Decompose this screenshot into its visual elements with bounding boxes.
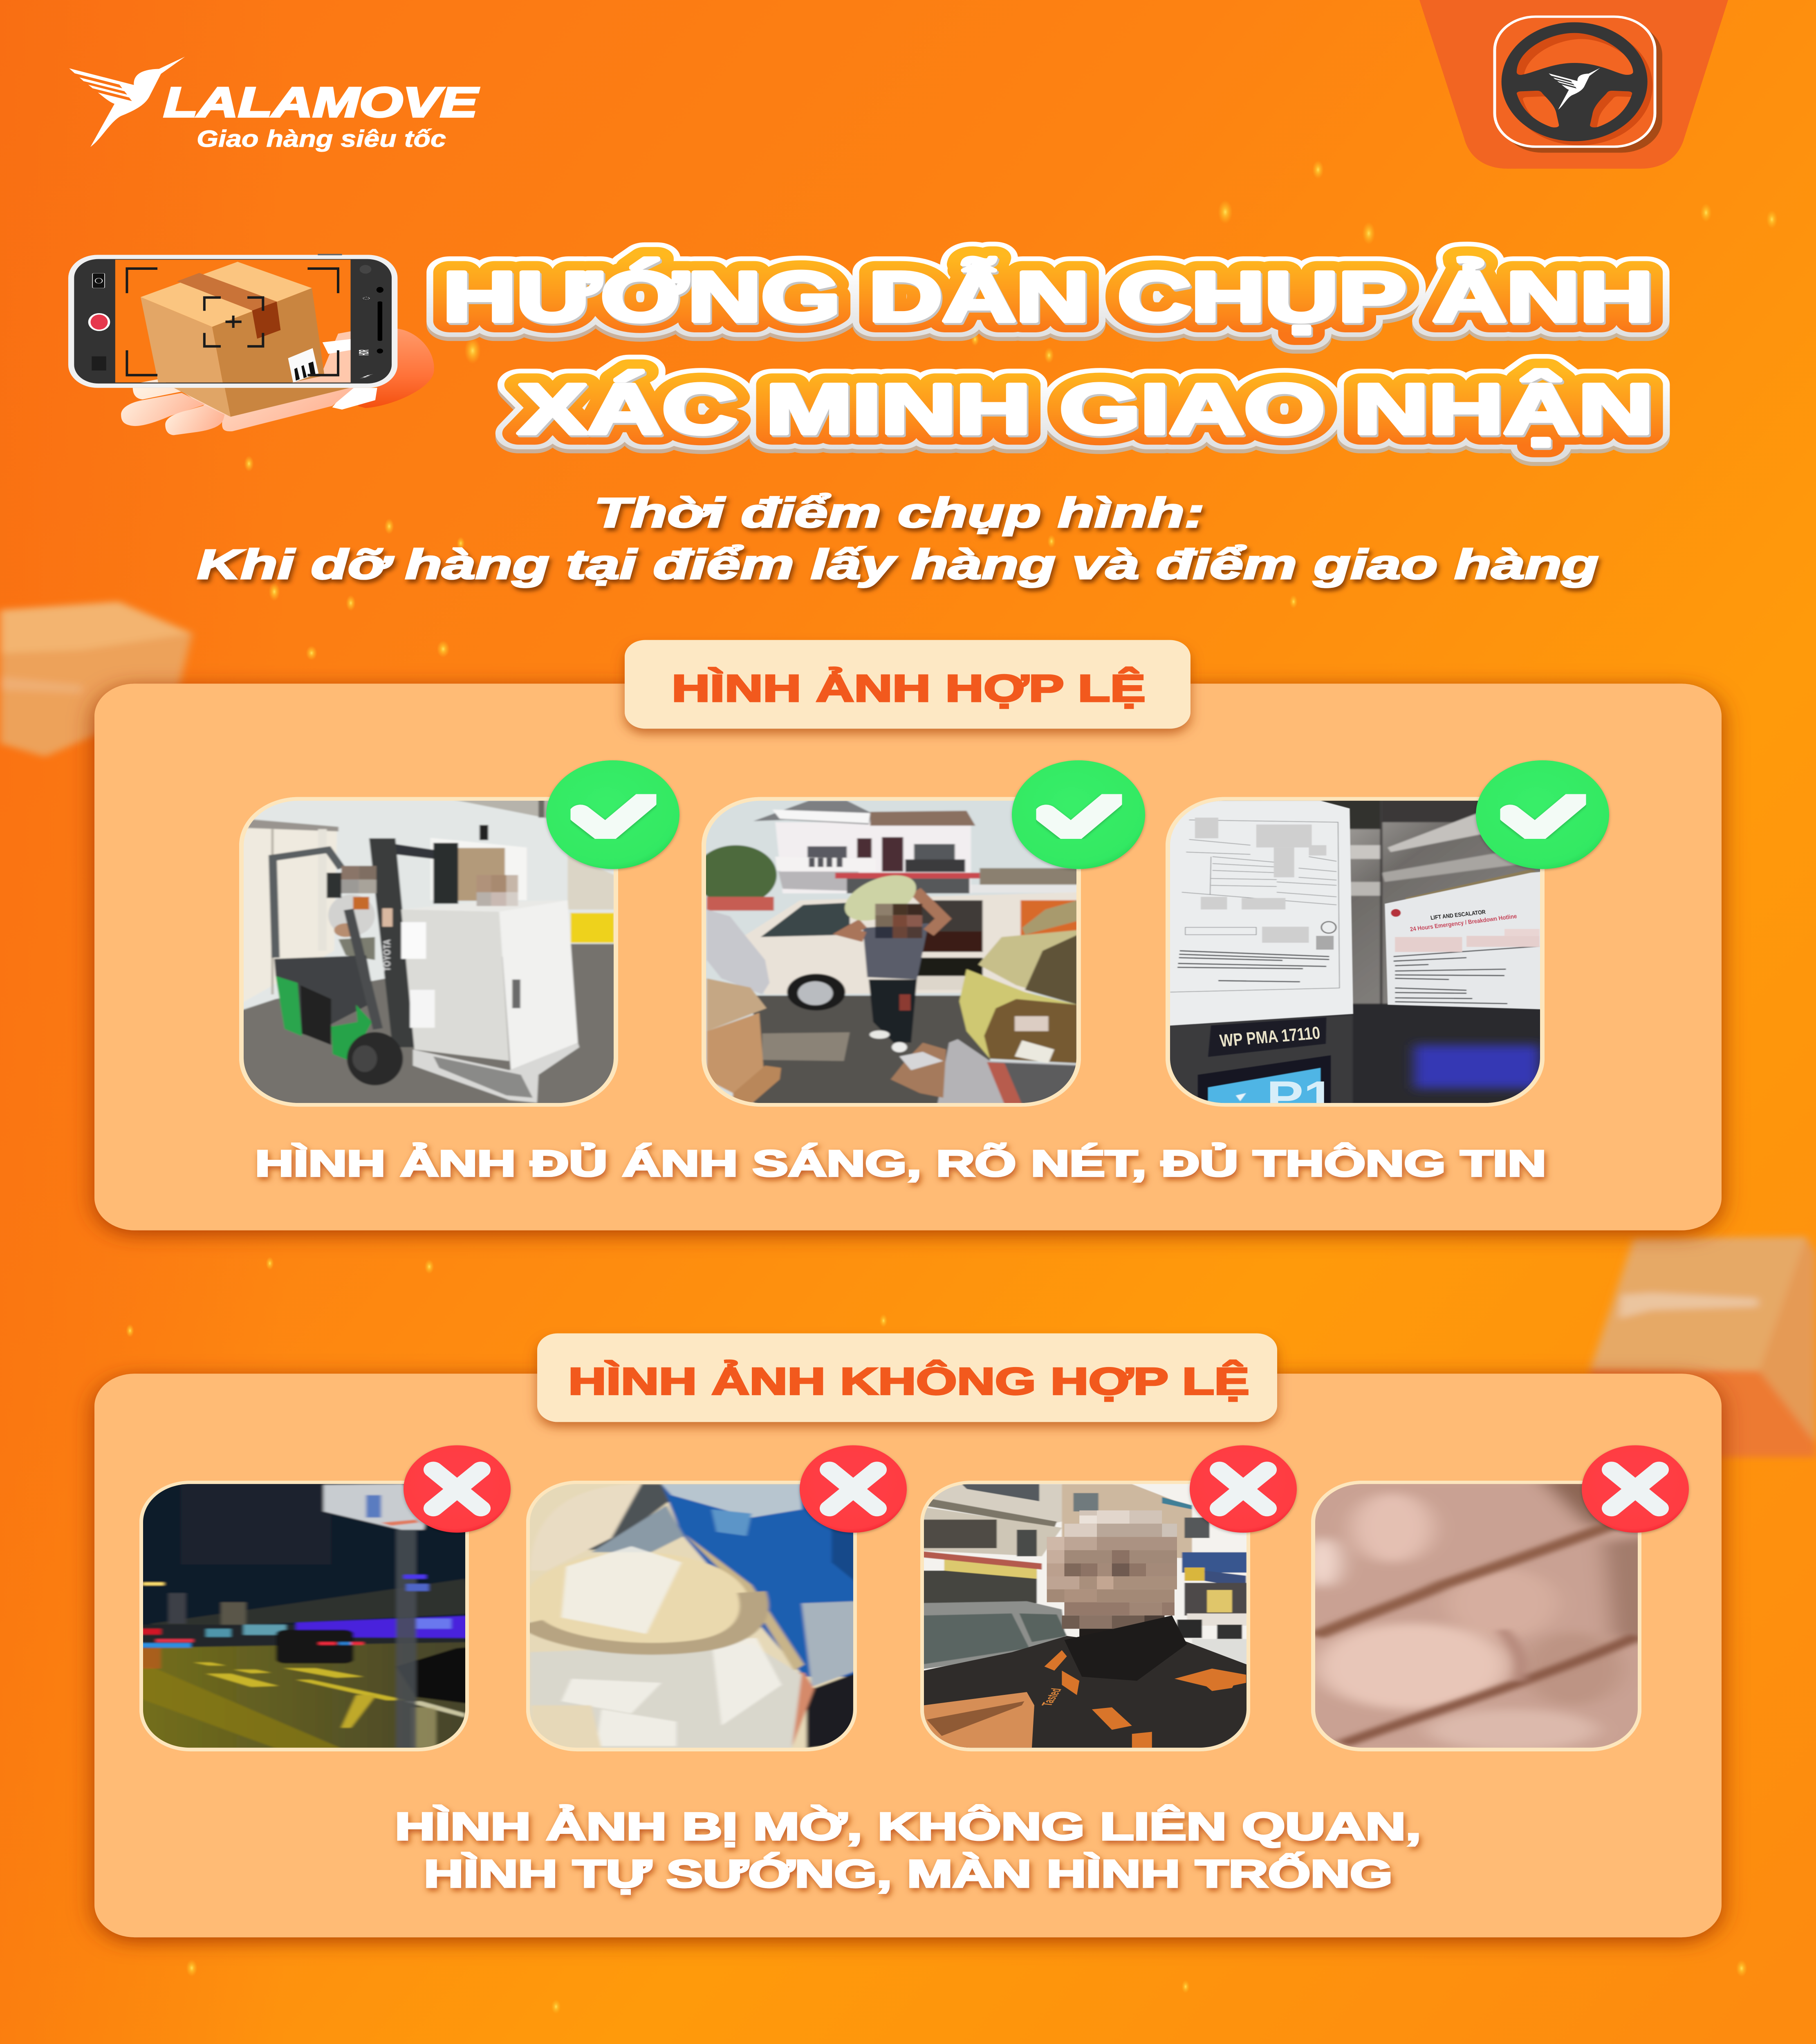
photo: blurry night road (131, 1481, 481, 1751)
pixelated face (912, 1511, 1252, 1750)
icon: cross 4 (1582, 1446, 1689, 1533)
photo: irrelevant parcel close-up (521, 1481, 862, 1751)
elevator plate label: WP PMA 17110 (1219, 1023, 1321, 1051)
panel: invalid photos (94, 1334, 1722, 1937)
heading tag: HÌNH ẢNH HỢP LỆ (672, 667, 1146, 710)
photo: delivery documents (1157, 797, 1566, 1121)
photo: forklift (229, 797, 638, 1109)
box right face (212, 288, 325, 383)
photo: forklift: TOYOTA (381, 939, 392, 971)
title line 1: HƯỚNG DẪN CHỤP ẢNH (444, 259, 1655, 338)
phone screen (115, 260, 354, 383)
icon: hummingbird (69, 57, 185, 147)
icon: check 2 (1012, 760, 1145, 869)
title line 2: XÁC MINH GIAO NHẬN (520, 372, 1655, 450)
title line 1: HƯỚNG DẪN CHỤP ẢNH (443, 257, 1653, 336)
box left face (141, 297, 223, 383)
box top face (141, 262, 312, 327)
box lower part (174, 388, 231, 417)
hand sleeve (358, 329, 434, 408)
title line 1: HƯỚNG DẪN CHỤP ẢNH (443, 261, 1653, 340)
photo: rider selfie (912, 1481, 1262, 1751)
phone body (68, 255, 397, 388)
wordmark: LALAMOVE (164, 79, 479, 126)
icon: cross 3 (1190, 1446, 1297, 1533)
app icon tile (1495, 17, 1655, 147)
title line 1: HƯỚNG DẪN CHỤP ẢNH (443, 257, 1653, 336)
subtitle line 1: Thời điểm chụp hình: (594, 490, 1204, 536)
caption: valid: HÌNH ẢNH ĐỦ ÁNH SÁNG, RÕ NÉT, ĐỦ THÔNG TIN (255, 1143, 1546, 1184)
decorative blurred box right (1590, 1237, 1816, 1457)
title (443, 257, 1655, 452)
heading tag (537, 1334, 1277, 1422)
phone controls (92, 273, 105, 288)
hand fingers (121, 388, 354, 435)
panel: valid photos (94, 640, 1722, 1230)
subtitle (197, 490, 1599, 588)
notice heading: LIFT AND ESCALATOR (1430, 909, 1486, 921)
title line 2: XÁC MINH GIAO NHẬN (518, 373, 1653, 452)
title line 1: HƯỚNG DẪN CHỤP ẢNH (443, 257, 1653, 336)
driver app badge (1419, 0, 1728, 169)
subtitle line 2: Khi dỡ hàng tại điểm lấy hàng và điểm giao hàng (197, 541, 1599, 588)
phone and hand illustration: HDR (356, 350, 372, 355)
tagline: Giao hàng siêu tốc (197, 125, 446, 152)
heading tag (625, 640, 1190, 728)
title line 2: XÁC MINH GIAO NHẬN (518, 370, 1653, 448)
notice hotline: 24 Hours Emergency / Breakdown Hotline (1409, 913, 1518, 933)
viewfinder brackets (127, 269, 338, 375)
icon: cross 1 (404, 1446, 511, 1533)
elevator screen label: P1 (1267, 1072, 1334, 1121)
hand cuff (332, 388, 377, 410)
photo: blank fingers (1292, 1477, 1663, 1754)
barcode label (288, 348, 318, 383)
photo: van and worker (695, 797, 1104, 1109)
title line 2: XÁC MINH GIAO NHẬN (518, 370, 1653, 448)
box tape (177, 273, 277, 311)
icon: steering wheel (1502, 22, 1652, 146)
caption: invalid (395, 1804, 1421, 1896)
badge tab (1419, 0, 1728, 169)
pixelated face: Tasted (1038, 1688, 1065, 1707)
caption line 1: HÌNH ẢNH BỊ MỜ, KHÔNG LIÊN QUAN, (395, 1804, 1421, 1848)
icon: check 1 (546, 760, 679, 869)
panel background (94, 1374, 1722, 1937)
icon: check 3 (1476, 760, 1609, 869)
phone and hand illustration (68, 254, 434, 435)
decorative blurred box left (0, 602, 192, 757)
title line 2: XÁC MINH GIAO NHẬN (518, 370, 1653, 448)
logo (69, 57, 479, 152)
icon: cross 2 (800, 1446, 907, 1533)
panel background (94, 684, 1722, 1230)
heading tag: HÌNH ẢNH KHÔNG HỢP LỆ (568, 1360, 1249, 1403)
caption line 2: HÌNH TỰ SƯỚNG, MÀN HÌNH TRỐNG (424, 1852, 1392, 1896)
icon shadow (1501, 22, 1662, 152)
